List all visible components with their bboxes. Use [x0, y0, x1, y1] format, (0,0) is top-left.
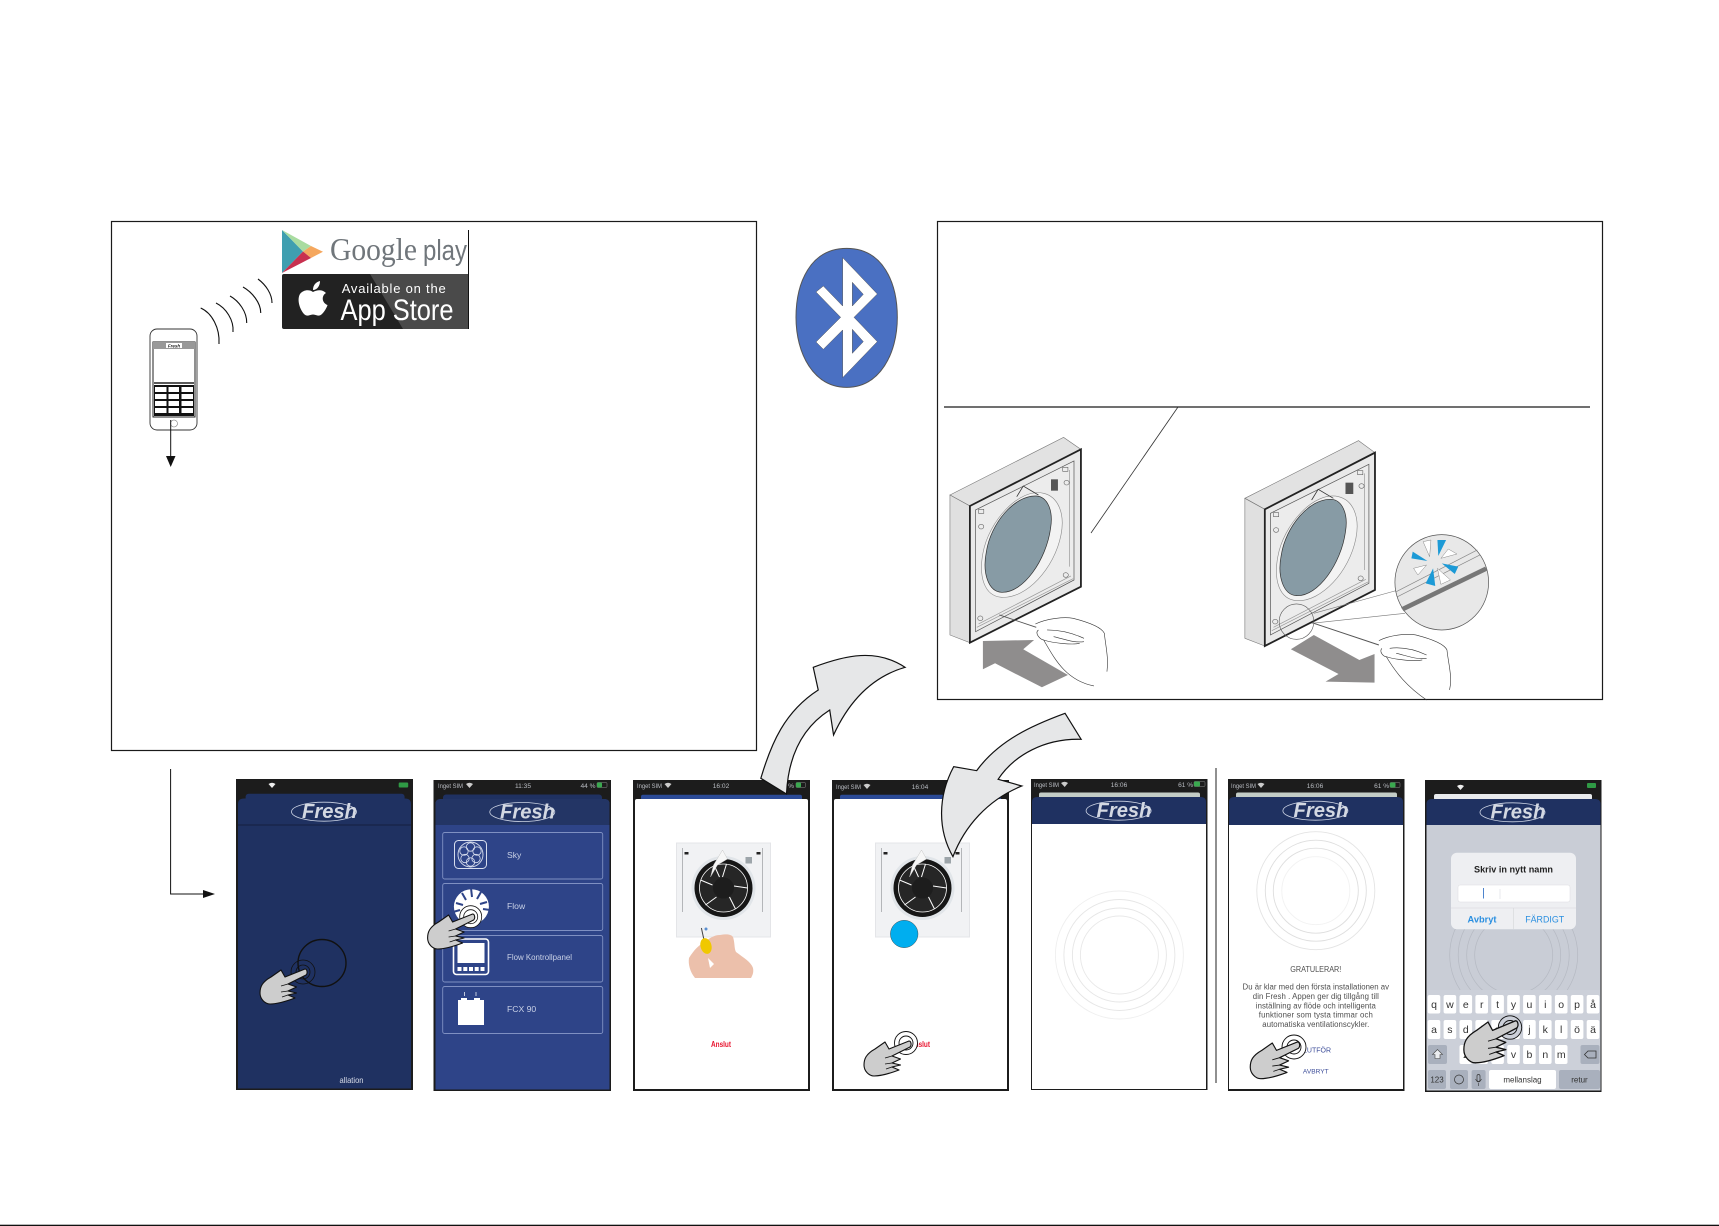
screen 3: connect with screwdriver: Inget SIM — [637, 783, 662, 790]
keyboard: x — [1479, 1049, 1485, 1061]
keyboard: g — [1495, 1024, 1501, 1036]
image: fan unit — [676, 843, 770, 937]
image: fan unit — [876, 843, 970, 937]
icon: Google Play badge — [282, 230, 468, 273]
keyboard: ä — [1590, 1024, 1596, 1036]
list item: Flow: Flow — [507, 901, 526, 911]
list item: Flow Kontrollpanel: Flow Kontrollpanel — [507, 952, 572, 962]
screen 5: searching: 61 % — [1178, 782, 1193, 789]
screen 5: searching: 16:06 — [1111, 782, 1128, 789]
screen 6: congratulations: Inget SIM — [1231, 783, 1256, 790]
screen 3: connect with screwdriver: 16:02 — [713, 783, 730, 790]
keyboard: r — [1480, 999, 1484, 1011]
keyboard: c — [1495, 1049, 1500, 1061]
logo: Fresh: Fresh — [1096, 800, 1152, 822]
keyboard: v — [1511, 1049, 1517, 1061]
screen 2: product list: 44 % — [580, 783, 596, 790]
keyboard: retur — [1571, 1076, 1588, 1084]
icon: App Store badge: Available on the — [342, 281, 446, 296]
button: Anslut: Anslut — [711, 1040, 731, 1049]
screen 4: connect with blue light: Inget SIM — [836, 784, 861, 791]
list item: FCX 90: FCX 90 — [507, 1004, 536, 1014]
panel: reset illustration — [938, 222, 1602, 700]
keyboard: t — [1496, 999, 1499, 1011]
icon: radar rings — [1257, 832, 1375, 950]
screen 6: congratulations: 61 % — [1374, 783, 1389, 790]
keyboard: o — [1558, 999, 1564, 1011]
logo: Fresh: Fresh — [302, 801, 357, 823]
button: SLUTFÖR: SLUTFÖR — [1298, 1046, 1331, 1054]
logo: Fresh: Fresh — [1294, 800, 1348, 822]
icon: tapping hand — [1464, 1016, 1522, 1063]
keyboard: f — [1480, 1024, 1483, 1036]
keyboard: a — [1431, 1024, 1437, 1036]
screen 2: product list: Inget SIM — [438, 783, 463, 790]
list item: Sky: Sky — [507, 850, 522, 860]
icon: Google Play badge: play — [423, 235, 467, 267]
screen 6: congratulations — [1228, 779, 1404, 1091]
screen 2: product list: 11:35 — [515, 783, 531, 790]
arrow: connector to first screen — [171, 769, 215, 898]
keyboard: n — [1542, 1049, 1548, 1061]
list item: Flow Kontrollpanel — [443, 936, 603, 982]
arrow: phone down — [166, 420, 176, 467]
list item: Sky — [443, 832, 603, 879]
screen 5: searching: Inget SIM — [1034, 782, 1059, 789]
keyboard: 123 — [1430, 1076, 1444, 1084]
divider between screens — [1215, 768, 1217, 1083]
screen 3: connect with screwdriver — [633, 780, 810, 1091]
keyboard: w — [1445, 999, 1454, 1011]
keyboard — [1426, 990, 1600, 1090]
icon: blue indicator — [890, 920, 918, 948]
icon: App Store badge: App Store — [340, 294, 454, 327]
text: installation: allation — [340, 1075, 364, 1085]
icon: radar rings behind dialog — [1450, 891, 1578, 1019]
screen 1: start — [236, 779, 413, 1090]
illustration: right device with magnifier — [1245, 441, 1489, 700]
icon: phone: Fresh — [168, 344, 180, 348]
keyboard: i — [1544, 999, 1546, 1011]
screen 4: connect with blue light — [832, 780, 1009, 1091]
keyboard: z — [1463, 1049, 1468, 1061]
keyboard: u — [1526, 999, 1532, 1011]
icon: Google Play badge: Google — [330, 231, 417, 267]
keyboard: e — [1463, 999, 1469, 1011]
logo: Fresh: Fresh — [500, 802, 555, 824]
keyboard: b — [1526, 1049, 1532, 1061]
icon: tapping hand — [864, 1032, 918, 1076]
keyboard: å — [1590, 999, 1596, 1011]
arrow: reset panel down to screen 4 — [942, 713, 1081, 857]
dialog: new name: Skriv in nytt namn — [1474, 864, 1553, 876]
button: Anslut: Anslut — [910, 1040, 930, 1049]
text: congratulations: funktioner som tysta timmar och — [1259, 1011, 1373, 1020]
list item: FCX 90 — [443, 986, 603, 1034]
keyboard: m — [1557, 1049, 1566, 1061]
keyboard: y — [1511, 999, 1517, 1011]
illustration: left device with hand — [950, 437, 1107, 687]
keyboard: l — [1560, 1024, 1562, 1036]
dialog: new name: FÄRDIGT — [1525, 914, 1564, 926]
keyboard: q — [1431, 999, 1437, 1011]
panel: app download — [112, 222, 756, 750]
icon: bluetooth — [796, 248, 897, 387]
keyboard: j — [1527, 1024, 1531, 1036]
keyboard: d — [1463, 1024, 1469, 1036]
screen 5: searching — [1031, 779, 1208, 1090]
dialog: new name — [1451, 853, 1576, 929]
keyboard: ö — [1574, 1024, 1580, 1036]
icon: App Store badge — [282, 230, 468, 329]
icon: signal arcs — [201, 279, 272, 344]
text: congratulations: din Fresh . Appen ger dig tillgång till — [1253, 992, 1379, 1001]
arrow: screen 3 up to reset panel — [761, 655, 905, 794]
list item: Flow — [443, 884, 603, 930]
keyboard: h — [1511, 1024, 1517, 1036]
image: hand with screwdriver — [689, 928, 753, 978]
keyboard: mellanslag — [1503, 1076, 1542, 1084]
keyboard: k — [1543, 1024, 1549, 1036]
screen 2: product list — [428, 780, 611, 1091]
button: AVBRYT: AVBRYT — [1303, 1068, 1329, 1076]
icon: tapping hand — [428, 906, 482, 949]
text: congratulations: Du är klar med den första installationen av — [1243, 982, 1389, 992]
keyboard: s — [1447, 1024, 1453, 1036]
screen 3: connect with screwdriver: % — [788, 783, 794, 790]
screen 6: congratulations: 16:06 — [1307, 783, 1324, 790]
icon: tapping hand — [260, 960, 315, 1004]
icon: wifi — [268, 783, 276, 788]
dialog: new name: Avbryt — [1468, 914, 1497, 926]
text: congratulations — [1243, 965, 1389, 1029]
icon: radar rings — [1055, 891, 1183, 1019]
keyboard: p — [1574, 999, 1580, 1011]
text: congratulations: inställning av flöde och intelligenta — [1256, 1001, 1376, 1010]
logo: Fresh: Fresh — [1490, 802, 1546, 824]
text: congratulations: automatiska ventilationscykler. — [1262, 1020, 1369, 1029]
icon: target circle — [298, 940, 346, 986]
icon: tapping hand — [1250, 1035, 1306, 1079]
screen 7: rename dialog and keyboard — [1425, 780, 1602, 1092]
screen 4: connect with blue light: 16:04 — [912, 784, 929, 791]
icon: phone — [150, 329, 197, 430]
text: congratulations: GRATULERAR! — [1290, 965, 1341, 974]
